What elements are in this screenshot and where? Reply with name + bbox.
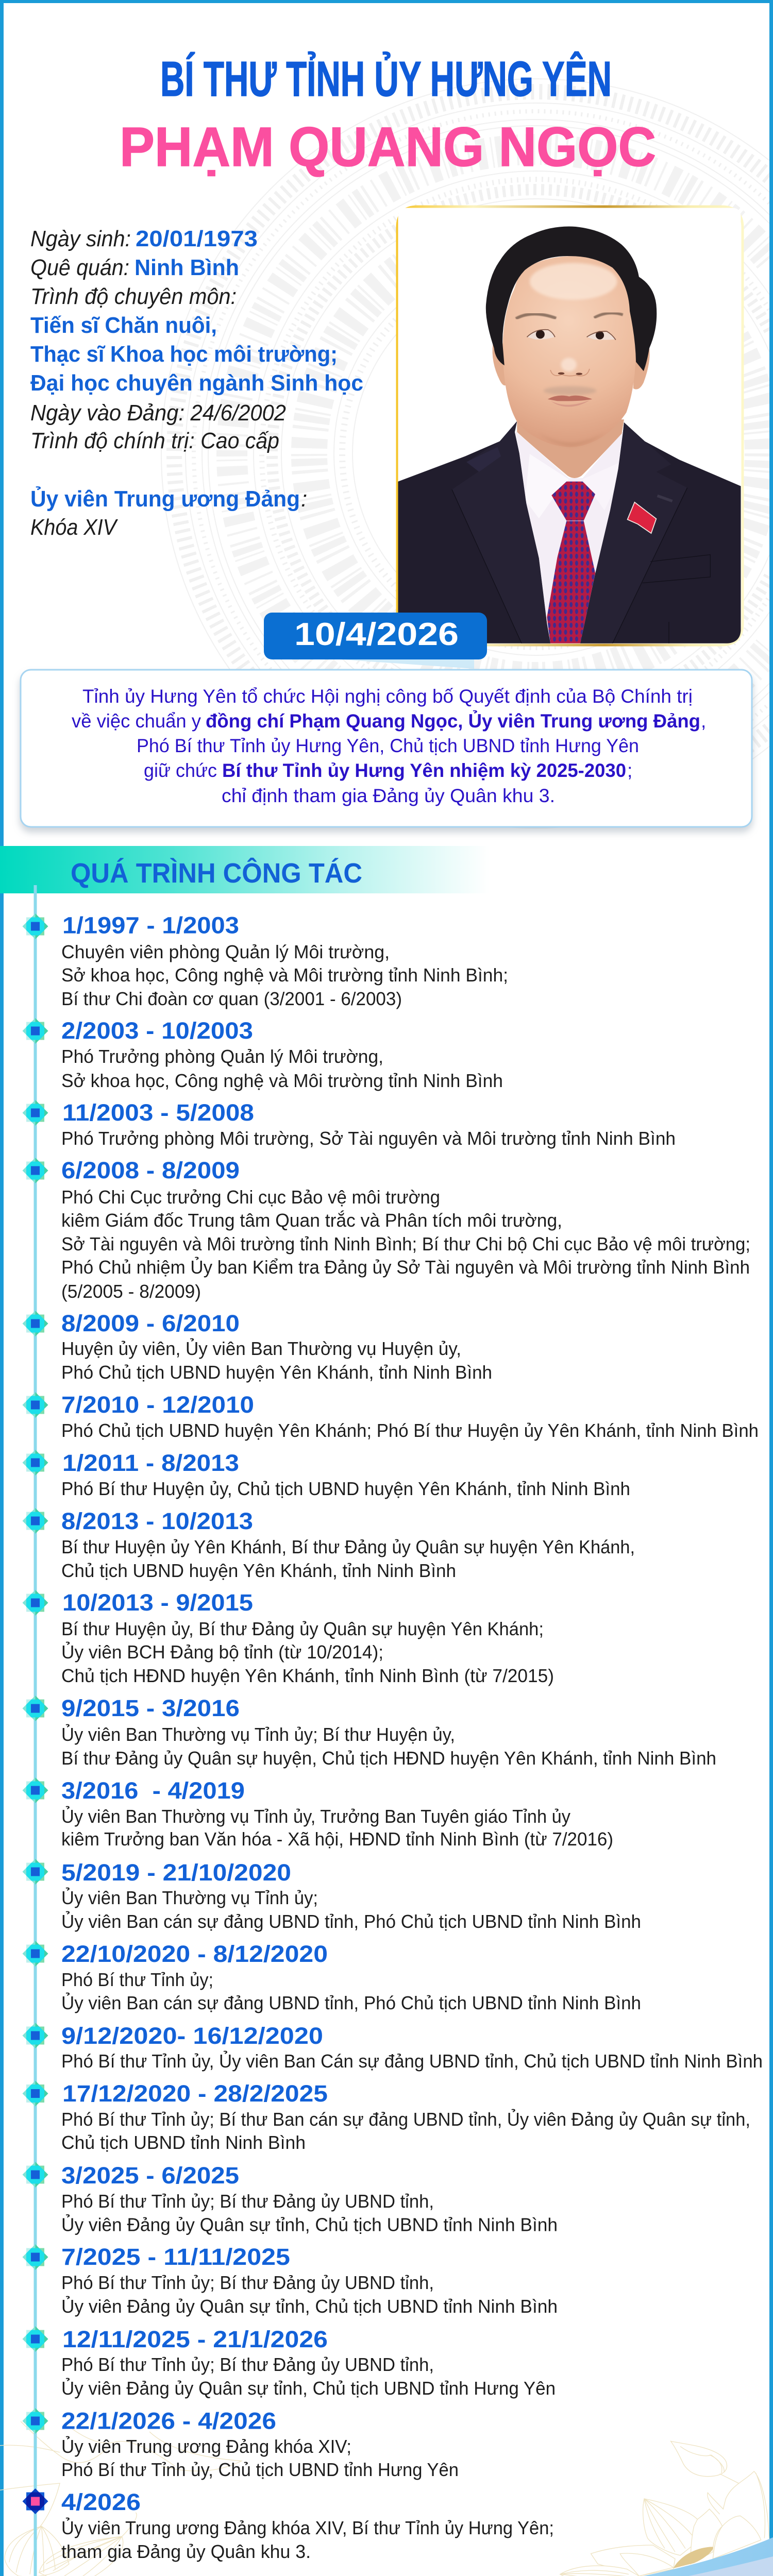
personal info text block: 20/01/1973 (136, 226, 258, 251)
timeline item 12/11/2025 - 21/1/2026: Phó Bí thư Tỉnh ủy; Bí thư Đảng ủy UBND tỉnh, (61, 2354, 434, 2375)
timeline item 2/2003 - 10/2003: 2/2003 - 10/2003 (61, 1018, 253, 1044)
lotus decoration: left (0, 2421, 288, 2576)
timeline item 22/1/2026 - 4/2026: Phó Bí thư Tỉnh ủy, Chủ tịch UBND tỉnh Hưng Yên (61, 2459, 459, 2480)
announcement text: Phó Bí thư Tỉnh ủy Hưng Yên, Chủ tịch UBND tỉnh Hưng Yên (137, 735, 639, 756)
announcement text: đồng chí Phạm Quang Ngọc, Ủy viên Trung ương Đảng (206, 710, 700, 732)
timeline item 4/2026 (current) (23, 2488, 554, 2562)
timeline item 7/2025 - 11/11/2025: 7/2025 - 11/11/2025 (61, 2244, 290, 2270)
timeline item 11/2003 - 5/2008: Phó Trưởng phòng Môi trường, Sở Tài nguyên và Môi trường tỉnh Ninh Bình (61, 1128, 676, 1149)
timeline item 8/2009 - 6/2010: Huyện ủy viên, Ủy viên Ban Thường vụ Huyện ủy, (61, 1337, 461, 1359)
timeline item 7/2025 - 11/11/2025: Ủy viên Đảng ủy Quân sự tỉnh, Chủ tịch UBND tỉnh Ninh Bình (61, 2295, 558, 2317)
announcement text: chỉ định tham gia Đảng ủy Quân khu 3. (222, 785, 555, 806)
personal info text block: Thạc sĩ Khoa học môi trường; (30, 342, 338, 367)
timeline item 2/2003 - 10/2003: Sở khoa học, Công nghệ và Môi trường tỉnh Ninh Bình (61, 1070, 503, 1091)
personal info text block: Ninh Bình (135, 255, 239, 280)
timeline item 1/1997 - 1/2003: Sở khoa học, Công nghệ và Môi trường tỉnh Ninh Bình; (61, 964, 508, 986)
personal info text block: Trình độ chuyên môn: (30, 284, 237, 309)
timeline item 8/2009 - 6/2010 (23, 1310, 492, 1383)
announcement text: Tỉnh ủy Hưng Yên tổ chức Hội nghị công bố Quyết định của Bộ Chính trị (82, 686, 693, 707)
timeline item 7/2010 - 12/2010: Phó Chủ tịch UBND huyện Yên Khánh; Phó Bí thư Huyện ủy Yên Khánh, tỉnh Ninh Bình (61, 1420, 759, 1441)
timeline item 7/2010 - 12/2010 (23, 1392, 759, 1441)
timeline item 4/2026 (current): tham gia Đảng ủy Quân khu 3. (61, 2541, 311, 2562)
gold frame (397, 207, 743, 645)
personal info text block: Ngày vào Đảng: 24/6/2002 (30, 400, 286, 426)
timeline item 1/2011 - 8/2013 (23, 1450, 630, 1499)
timeline item 7/2010 - 12/2010: 7/2010 - 12/2010 (61, 1392, 254, 1418)
timeline item 17/12/2020 - 28/2/2025: Chủ tịch UBND tỉnh Ninh Bình (61, 2132, 306, 2153)
announcement text: ; (627, 760, 632, 781)
chin shadow (562, 443, 582, 445)
timeline item 9/12/2020 - 16/12/2020: Phó Bí thư Tỉnh ủy, Ủy viên Ban Cán sự đảng UBND tỉnh, Chủ tịch UBND tỉnh Ninh Bình (61, 2050, 763, 2072)
timeline item 22/10/2020 - 8/12/2020: Phó Bí thư Tỉnh ủy; (61, 1969, 213, 1990)
suit body (398, 421, 550, 643)
timeline item 9/12/2020 - 16/12/2020: 9/12/2020- 16/12/2020 (61, 2023, 323, 2049)
brows (516, 314, 556, 319)
timeline item 8/2013 - 10/2013: Bí thư Huyện ủy Yên Khánh, Bí thư Đảng ủy Quân sự huyện Yên Khánh, (61, 1536, 635, 1557)
announcement text: về việc chuẩn y (72, 710, 201, 732)
forehead highlight (530, 263, 617, 300)
timeline item 17/12/2020 - 28/2/2025: Phó Bí thư Tỉnh ủy; Bí thư Ban cán sự đảng UBND tỉnh, Ủy viên Đảng ủy Quân sự tỉnh, (61, 2108, 750, 2130)
timeline item 6/2008 - 8/2009: Phó Chủ nhiệm Ủy ban Kiểm tra Đảng ủy Sở Tài nguyên và Môi trường tỉnh Ninh Bình (61, 1256, 750, 1278)
section heading band: QUÁ TRÌNH CÔNG TÁC (71, 857, 362, 889)
personal info text block: Ủy viên Trung ương Đảng (30, 485, 300, 512)
timeline item 12/11/2025 - 21/1/2026: Ủy viên Đảng ủy Quân sự tỉnh, Chủ tịch UBND tỉnh Hưng Yên (61, 2377, 556, 2399)
date badge: 10/4/2026 (294, 617, 459, 652)
timeline item 22/1/2026 - 4/2026 (23, 2408, 459, 2480)
portrait (398, 208, 741, 643)
timeline item 1/2011 - 8/2013: 1/2011 - 8/2013 (62, 1450, 239, 1476)
announcement text: giữ chức (144, 760, 217, 781)
timeline item 5/2019 - 21/10/2020 (23, 1859, 641, 1932)
date badge (264, 613, 487, 659)
timeline item 4/2026 (current): 4/2026 (61, 2489, 141, 2515)
timeline item 9/2015 - 3/2016: Bí thư Đảng ủy Quân sự huyện, Chủ tịch HĐND huyện Yên Khánh, tỉnh Ninh Bình (61, 1748, 716, 1769)
personal info text block: Trình độ chính trị: Cao cấp (30, 428, 279, 453)
timeline item 6/2008 - 8/2009: (5/2005 - 8/2009) (61, 1281, 201, 1302)
timeline item 11/2003 - 5/2008 (23, 1099, 676, 1149)
timeline item 1/1997 - 1/2003: Chuyên viên phòng Quản lý Môi trường, (61, 941, 390, 962)
drum pattern background (161, 79, 769, 828)
timeline item 1/2011 - 8/2013: Phó Bí thư Huyện ủy, Chủ tịch UBND huyện Yên Khánh, tỉnh Ninh Bình (61, 1478, 630, 1499)
timeline item 3/2016 - 4/2019: Ủy viên Ban Thường vụ Tỉnh ủy, Trưởng Ban Tuyên giáo Tỉnh ủy (61, 1805, 570, 1827)
timeline item 6/2008 - 8/2009: Phó Chi Cục trưởng Chi cục Bảo vệ môi trường (61, 1187, 440, 1208)
footer waves (173, 2537, 773, 2576)
timeline item 8/2013 - 10/2013: Chủ tịch UBND huyện Yên Khánh, tỉnh Ninh Bình (61, 1560, 456, 1581)
personal info text block (30, 226, 363, 540)
timeline item 1/1997 - 1/2003 (23, 912, 508, 1009)
eyes (527, 330, 554, 340)
timeline item 12/11/2025 - 21/1/2026 (23, 2326, 556, 2399)
timeline item 3/2025 - 6/2025: 3/2025 - 6/2025 (61, 2162, 239, 2189)
heading: name: PHẠM QUANG NGỌC (120, 115, 656, 178)
timeline item 6/2008 - 8/2009: Sở Tài nguyên và Môi trường tỉnh Ninh Bình; Bí thư Chi bộ Chi cục Bảo vệ môi trường; (61, 1233, 750, 1255)
badge wedge shadow (340, 659, 474, 669)
timeline item 3/2016 - 4/2019: kiêm Trưởng ban Văn hóa - Xã hội, HĐND tỉnh Ninh Bình (từ 7/2016) (61, 1828, 613, 1850)
timeline item 1/1997 - 1/2003: 1/1997 - 1/2003 (62, 912, 239, 939)
upper-lip shadow (544, 386, 596, 395)
timeline item 3/2025 - 6/2025: Phó Bí thư Tỉnh ủy; Bí thư Đảng ủy UBND tỉnh, (61, 2191, 434, 2212)
timeline item 6/2008 - 8/2009: 6/2008 - 8/2009 (61, 1157, 240, 1183)
timeline item 9/2015 - 3/2016: Ủy viên Ban Thường vụ Tỉnh ủy; Bí thư Huyện ủy, (61, 1723, 455, 1745)
mouth (548, 396, 592, 401)
timeline item 2/2003 - 10/2003: Phó Trưởng phòng Quản lý Môi trường, (61, 1046, 383, 1067)
hair (486, 227, 657, 371)
announcement text: Bí thư Tỉnh ủy Hưng Yên nhiệm kỳ 2025-2030 (222, 760, 626, 781)
timeline item 9/12/2020 - 16/12/2020 (23, 2023, 763, 2072)
timeline item 3/2025 - 6/2025 (23, 2162, 558, 2235)
timeline vertical line (34, 885, 37, 2576)
timeline item 22/1/2026 - 4/2026: 22/1/2026 - 4/2026 (61, 2408, 276, 2434)
shirt (515, 431, 623, 643)
ears (493, 344, 507, 385)
timeline item 8/2013 - 10/2013 (23, 1508, 635, 1581)
timeline item 22/1/2026 - 4/2026: Ủy viên Trung ương Đảng khóa XIV; (61, 2435, 351, 2457)
tie (551, 482, 595, 521)
timeline item 4/2026 (current): Ủy viên Trung ương Đảng khóa XIV, Bí thư Tỉnh ủy Hưng Yên; (61, 2517, 554, 2538)
timeline item 8/2009 - 6/2010: 8/2009 - 6/2010 (61, 1310, 240, 1336)
personal info text block: Đại học chuyên ngành Sinh học (30, 370, 363, 396)
timeline item 10/2013 - 9/2015: Chủ tịch HĐND huyện Yên Khánh, tỉnh Ninh Bình (từ 7/2015) (61, 1665, 554, 1686)
timeline item 9/2015 - 3/2016: 9/2015 - 3/2016 (61, 1695, 240, 1721)
announcement box (21, 670, 752, 827)
timeline item 8/2013 - 10/2013: 8/2013 - 10/2013 (61, 1508, 253, 1534)
announcement text (72, 686, 706, 806)
lotus decoration: right (515, 2441, 769, 2576)
face (503, 256, 636, 421)
personal info text block: Ngày sinh: (30, 226, 131, 251)
timeline item 2/2003 - 10/2003 (23, 1018, 503, 1091)
suit lapels (499, 421, 550, 643)
personal info text block: Tiến sĩ Chăn nuôi, (30, 313, 217, 338)
timeline item 3/2025 - 6/2025: Ủy viên Đảng ủy Quân sự tỉnh, Chủ tịch UBND tỉnh Ninh Bình (61, 2213, 558, 2235)
timeline item 6/2008 - 8/2009 (23, 1157, 750, 1302)
timeline item 3/2016 - 4/2019: 3/2016 - 4/2019 (61, 1777, 245, 1804)
timeline item 22/10/2020 - 8/12/2020: 22/10/2020 - 8/12/2020 (61, 1941, 328, 1967)
announcement text: , (701, 710, 706, 732)
timeline item 10/2013 - 9/2015 (23, 1589, 554, 1686)
neck (517, 419, 624, 478)
nose (561, 358, 577, 371)
timeline item 22/10/2020 - 8/12/2020 (23, 1941, 641, 2013)
timeline item 6/2008 - 8/2009: kiêm Giám đốc Trung tâm Quan trắc và Phân tích môi trường, (61, 1210, 562, 1231)
timeline item 5/2019 - 21/10/2020: Ủy viên Ban Thường vụ Tỉnh ủy; (61, 1887, 318, 1908)
timeline item 11/2003 - 5/2008: 11/2003 - 5/2008 (62, 1099, 254, 1126)
section heading band (0, 846, 490, 893)
timeline item 10/2013 - 9/2015: 10/2013 - 9/2015 (62, 1589, 253, 1616)
party pin (628, 502, 656, 533)
personal info text block: : (301, 486, 307, 512)
timeline item 7/2025 - 11/11/2025 (23, 2244, 558, 2317)
timeline item 3/2016 - 4/2019 (23, 1777, 613, 1850)
timeline item 5/2019 - 21/10/2020: Ủy viên Ban cán sự đảng UBND tỉnh, Phó Chủ tịch UBND tỉnh Ninh Bình (61, 1910, 641, 1932)
timeline item 12/11/2025 - 21/1/2026: 12/11/2025 - 21/1/2026 (62, 2326, 328, 2352)
timeline item 8/2009 - 6/2010: Phó Chủ tịch UBND huyện Yên Khánh, tỉnh Ninh Bình (61, 1362, 492, 1383)
timeline item 10/2013 - 9/2015: Ủy viên BCH Đảng bộ tỉnh (từ 10/2014); (61, 1641, 383, 1663)
timeline item 1/1997 - 1/2003: Bí thư Chi đoàn cơ quan (3/2001 - 6/2003) (61, 988, 402, 1009)
timeline item 10/2013 - 9/2015: Bí thư Huyện ủy, Bí thư Đảng ủy Quân sự huyện Yên Khánh; (61, 1618, 544, 1639)
timeline item 7/2025 - 11/11/2025: Phó Bí thư Tỉnh ủy; Bí thư Đảng ủy UBND tỉnh, (61, 2272, 434, 2293)
timeline item 17/12/2020 - 28/2/2025 (23, 2080, 750, 2153)
timeline item 9/2015 - 3/2016 (23, 1695, 716, 1769)
personal info text block: Quê quán: (30, 255, 129, 280)
timeline item 5/2019 - 21/10/2020: 5/2019 - 21/10/2020 (61, 1859, 291, 1886)
timeline item 22/10/2020 - 8/12/2020: Ủy viên Ban cán sự đảng UBND tỉnh, Phó Chủ tịch UBND tỉnh Ninh Bình (61, 1992, 641, 2013)
portrait photo with gold frame (397, 207, 743, 645)
timeline item 17/12/2020 - 28/2/2025: 17/12/2020 - 28/2/2025 (62, 2080, 328, 2107)
personal info text block: Khóa XIV (30, 515, 118, 540)
